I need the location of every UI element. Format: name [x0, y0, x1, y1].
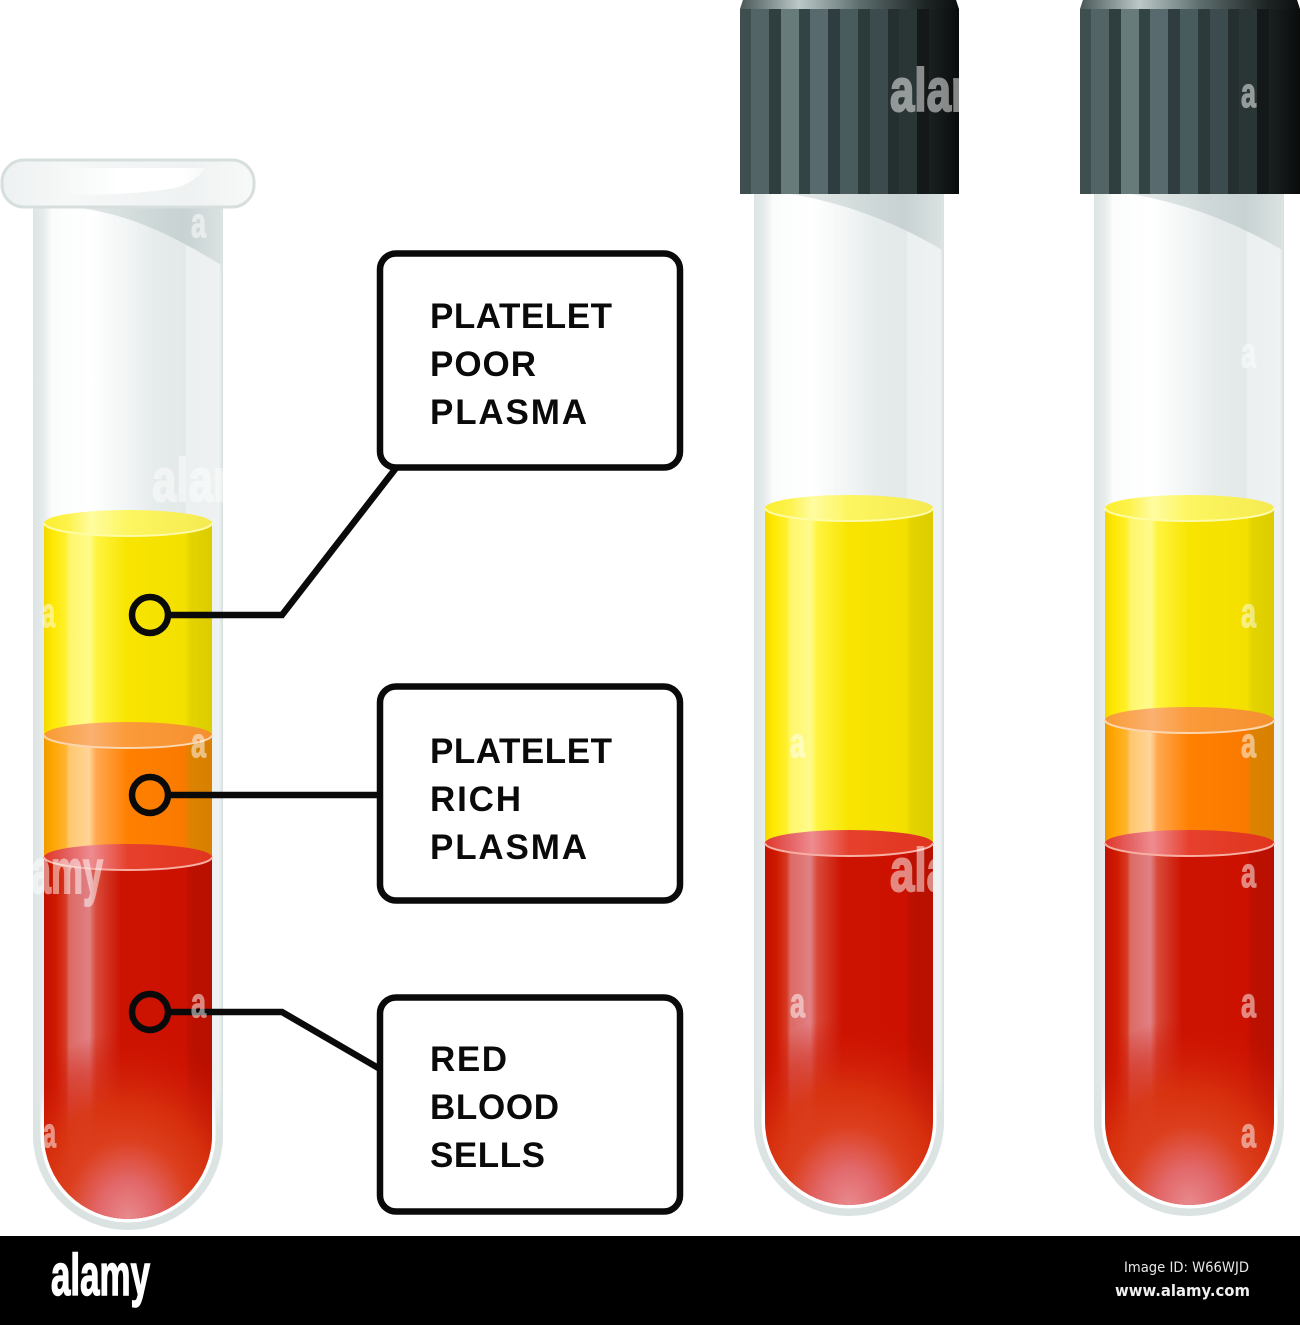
glass bottom ring [37, 1090, 219, 1226]
label box: red blood sells [380, 998, 680, 1212]
test tube: left, three layers [2, 160, 254, 1228]
watermarks: a [191, 719, 206, 766]
liquid: red layer [1105, 830, 1274, 1205]
liquid: orange layer [44, 722, 212, 857]
liquid: yellow layer [765, 495, 933, 843]
watermarks: a [1241, 719, 1256, 766]
footer image id: Image ID: W66WJD [1124, 1260, 1249, 1276]
watermarks: a [191, 199, 206, 246]
footer bar [0, 1236, 1300, 1325]
footer url: www.alamy.com [1115, 1281, 1250, 1300]
watermarks: alam [152, 447, 252, 514]
liquid: red layer [765, 830, 933, 1205]
watermarks: alam [890, 837, 990, 904]
watermarks: a [1241, 979, 1256, 1026]
liquid: yellow layer [1105, 495, 1274, 720]
watermarks: a [1241, 589, 1256, 636]
top shade [1131, 194, 1282, 250]
leader line: platelet rich plasma [132, 777, 380, 813]
watermarks: a [1241, 329, 1256, 376]
label box: red blood sells: BLOOD [430, 1088, 559, 1127]
cap [740, 0, 959, 194]
glass bottom ring [1098, 1076, 1280, 1212]
watermarks: a [1241, 69, 1256, 116]
cap [1080, 0, 1300, 194]
glass bottom ring [758, 1076, 940, 1212]
watermarks [31, 57, 1256, 1156]
top shade [791, 194, 942, 250]
flange [2, 160, 254, 207]
test tube: centre, with cap [740, 0, 959, 1214]
top shade [70, 207, 221, 265]
label box: platelet rich plasma: PLATELET [430, 732, 612, 771]
label box: platelet rich plasma: RICH [430, 780, 521, 819]
label box: platelet rich plasma [380, 686, 680, 900]
liquid: yellow layer [44, 510, 212, 735]
label box: platelet poor plasma [380, 254, 680, 468]
label box: red blood sells: SELLS [430, 1136, 545, 1175]
glass body [754, 190, 944, 1214]
glass inner gap [1105, 1076, 1274, 1205]
liquid: orange layer [1105, 707, 1274, 843]
glass inner gap [44, 1090, 212, 1219]
label box: platelet poor plasma: POOR [430, 345, 536, 384]
watermarks: a [42, 589, 55, 636]
leader line: platelet poor plasma [132, 468, 396, 633]
watermarks: a [1241, 1109, 1256, 1156]
watermarks: a [790, 719, 805, 766]
watermarks: a [1241, 849, 1256, 896]
glass body [1094, 190, 1284, 1214]
leader line: red blood sells [132, 994, 380, 1069]
label box: red blood sells: RED [430, 1040, 507, 1079]
watermarks: amy [31, 838, 103, 907]
watermarks: alam [890, 57, 990, 124]
watermarks: a [790, 979, 805, 1026]
glass body [33, 190, 223, 1228]
watermarks: a [191, 979, 206, 1026]
label box: platelet poor plasma: PLATELET [430, 297, 612, 336]
glass inner gap [765, 1076, 933, 1205]
label box: platelet rich plasma: PLASMA [430, 828, 587, 867]
footer logo: alamy [51, 1243, 150, 1308]
liquid: red layer [44, 844, 212, 1219]
label box: platelet poor plasma: PLASMA [430, 393, 587, 432]
watermarks: a [43, 1109, 56, 1156]
test tube: right, with cap [1080, 0, 1300, 1214]
